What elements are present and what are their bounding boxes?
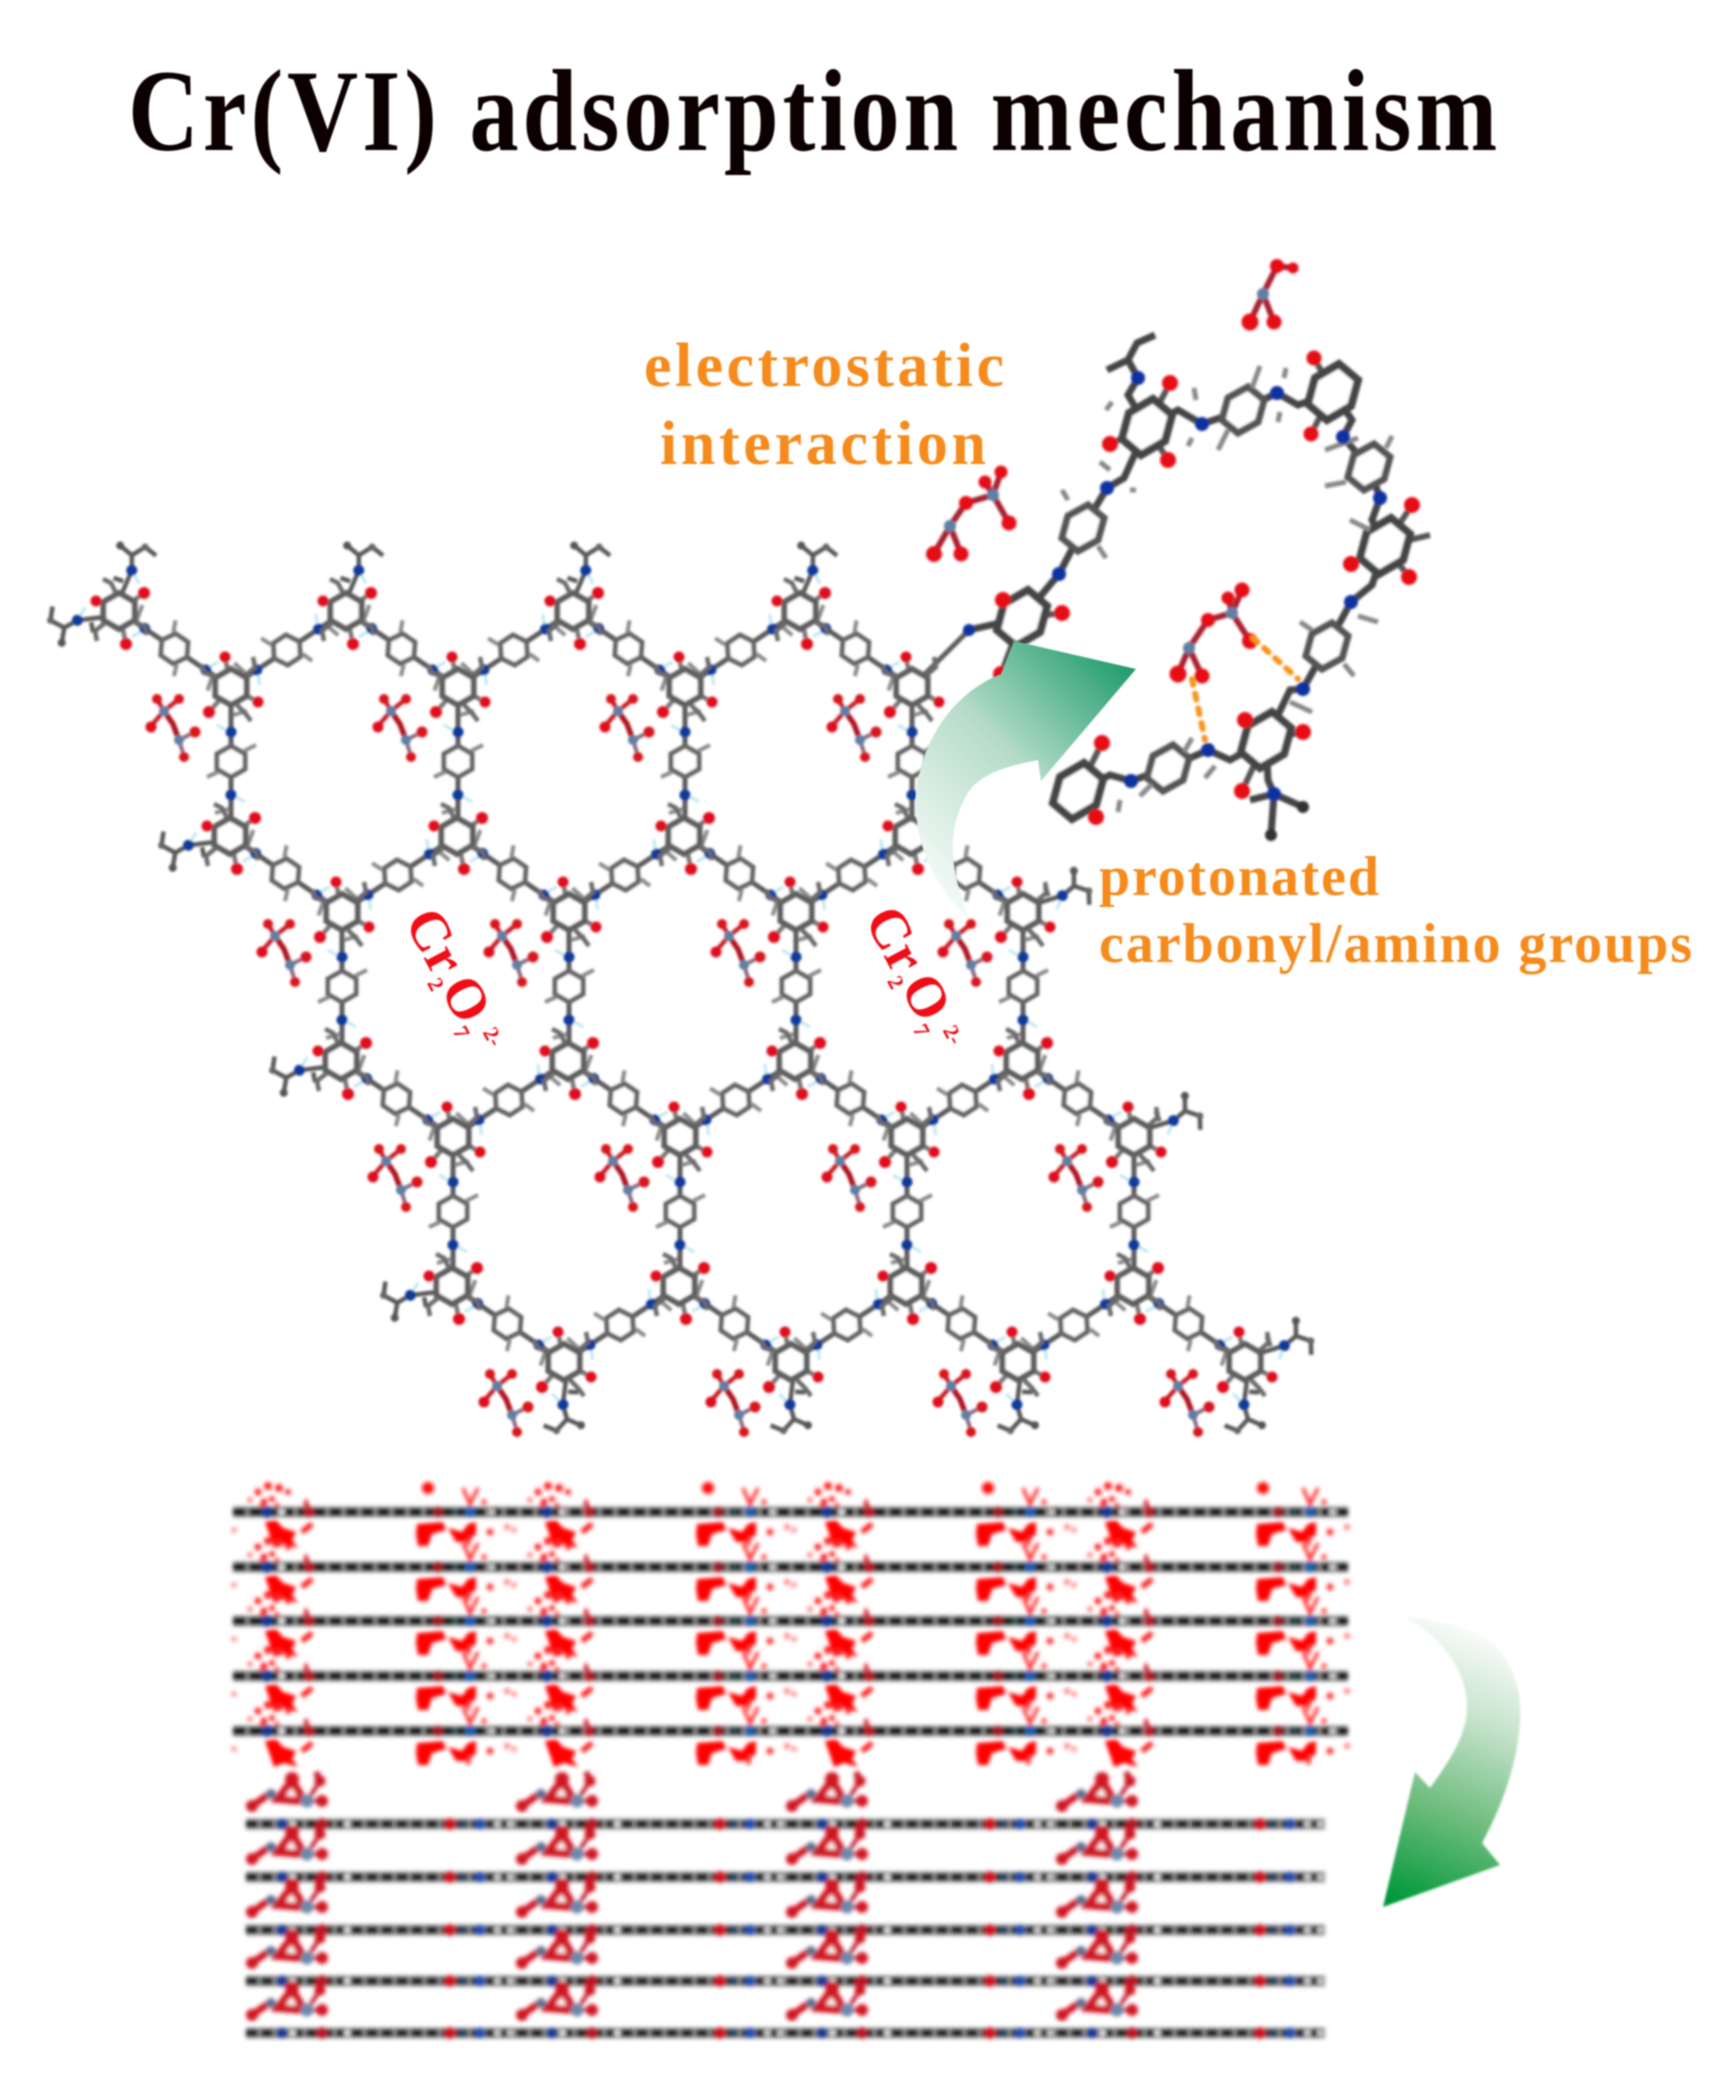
framework layers xyxy=(233,1506,1348,1737)
red label: dichromate, left pore: 2 xyxy=(422,973,450,995)
red label: dichromate, left pore xyxy=(392,898,519,1063)
honeycomb framework: top-view lattice xyxy=(43,540,1320,1437)
label: protonated carbonyl/amino groups xyxy=(1099,846,1692,975)
label: electrostatic interaction xyxy=(644,332,1004,478)
red label: dichromate, right pore: 7 xyxy=(908,1020,935,1041)
red label: dichromate, left pore: 2- xyxy=(478,1023,509,1051)
title: Cr(VI) adsorption mechanism xyxy=(128,47,1497,176)
bound dichromate ion in pore xyxy=(1170,582,1258,684)
red label: dichromate, left pore: 7 xyxy=(448,1022,475,1043)
dichromate ions in the pores xyxy=(146,694,1214,1437)
side view: disordered red ions between stacked layers xyxy=(231,1482,1350,1767)
magnified pore with adsorbed ions xyxy=(926,259,1430,841)
label: electrostatic interaction: interaction xyxy=(660,410,986,478)
red label: dichromate, right pore: 2- xyxy=(938,1021,969,1049)
free dichromate ion, left xyxy=(926,466,1016,562)
red label: dichromate, right pore xyxy=(852,896,979,1061)
red label: dichromate, right pore: 2 xyxy=(882,971,910,993)
red label: dichromate, left pore: O xyxy=(428,965,504,1033)
free dichromate ion, top xyxy=(1242,259,1298,330)
label: protonated carbonyl/amino groups: carbonyl/amino groups xyxy=(1099,913,1692,975)
arrow: disordered stack to ordered stack xyxy=(1383,1617,1520,1907)
label: protonated carbonyl/amino groups: protonated xyxy=(1099,846,1379,908)
side view: ordered ions between stacked layers xyxy=(246,1772,1325,2039)
framework layers xyxy=(246,1818,1325,2039)
lattice linkers xyxy=(106,591,1258,1381)
red ion clusters xyxy=(231,1482,1350,1767)
lattice core rings xyxy=(90,579,1278,1396)
arrow: lattice to magnified pore xyxy=(916,641,1136,919)
orange hydrogen-bond dotted lines xyxy=(1192,638,1298,740)
red label: dichromate, right pore: Cr xyxy=(853,896,938,983)
lattice end caps xyxy=(43,540,1320,1436)
ordered ion clusters xyxy=(246,1772,1138,2021)
label: electrostatic interaction: electrostatic xyxy=(644,332,1004,400)
red label: dichromate, right pore: O xyxy=(888,963,964,1031)
magnified framework chain xyxy=(963,335,1430,841)
red label: dichromate, left pore: Cr xyxy=(393,898,478,985)
